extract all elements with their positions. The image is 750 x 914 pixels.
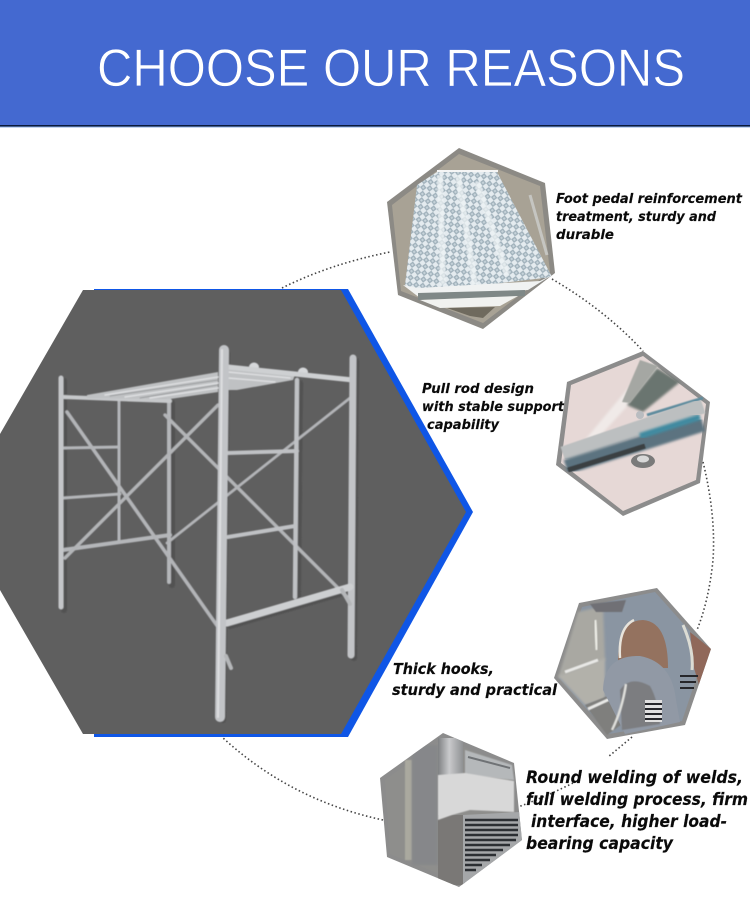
- photo: pull rod: [556, 351, 710, 516]
- caption: pull rod: with stable support: [422, 399, 565, 415]
- title: CHOOSE OUR REASONS: [97, 39, 685, 98]
- rear frame: [61, 378, 170, 607]
- caption: foot pedal: Foot pedal reinforcement: [556, 191, 743, 207]
- caption: welds: bearing capacity: [526, 834, 674, 853]
- header band: [0, 0, 750, 127]
- scaffold frame: [61, 350, 356, 720]
- caption: hooks: Thick hooks,: [393, 660, 494, 678]
- main hexagon with blue edge: [0, 289, 473, 737]
- caption: foot pedal: durable: [556, 227, 614, 243]
- photo: welds: [380, 733, 522, 887]
- caption: pull rod: capability: [427, 417, 500, 433]
- photo: foot pedal: [387, 148, 555, 329]
- dotted connector ring: [222, 252, 714, 820]
- caption: welds: Round welding of welds,: [526, 768, 743, 787]
- deck: [87, 362, 308, 399]
- photo: hooks: [554, 588, 711, 739]
- caption: hooks: sturdy and practical: [392, 681, 558, 699]
- shadow of scaffold: [64, 353, 356, 720]
- diagonal braces: [65, 398, 350, 627]
- caption: pull rod: Pull rod design: [422, 381, 534, 397]
- caption: welds: interface, higher load-: [531, 812, 727, 831]
- front frame: [218, 350, 353, 717]
- caption: foot pedal: treatment, sturdy and: [556, 209, 716, 225]
